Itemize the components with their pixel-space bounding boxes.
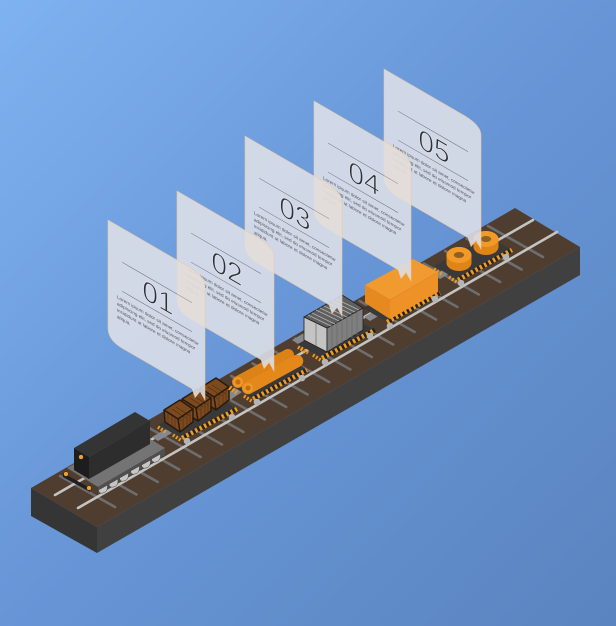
flatbed: [158, 394, 237, 438]
card 02: [177, 191, 274, 374]
railway platform: [31, 208, 580, 553]
crate 2: [182, 389, 211, 421]
card 03 body text: adipiscing elit, sed do eiusmod tempor: [254, 217, 333, 268]
headlights: [64, 455, 91, 490]
card 01 body text: Lorem ipsum dolor sit amet, consectetur: [117, 295, 199, 347]
card 02 body text: Lorem ipsum dolor sit amet, consectetur: [186, 266, 268, 318]
card 03: 03: [279, 190, 311, 239]
card 05 body text: incididunt ut labore et dolore magna: [393, 157, 466, 205]
end hazard marks: [298, 347, 322, 361]
card 05 body text: aliqua.: [393, 163, 407, 176]
card 02 body text: adipiscing elit, sed do eiusmod tempor: [186, 272, 265, 323]
flatbed: [434, 236, 512, 280]
card 04: 04: [348, 155, 380, 204]
card 05: 05: [418, 123, 450, 172]
card 01 body text: aliqua.: [117, 314, 131, 327]
card 03 body text: Lorem ipsum dolor sit amet, consectetur: [254, 211, 336, 263]
hazard band: [253, 370, 307, 399]
hazard band: [322, 330, 375, 358]
ring back: [474, 231, 498, 255]
crate 3: [200, 378, 229, 410]
end hazard marks: [229, 348, 308, 402]
card 02: 02: [211, 245, 243, 294]
card 04 body text: adipiscing elit, sed do eiusmod tempor: [323, 182, 402, 233]
ring front: [446, 247, 472, 271]
wheels: [254, 375, 305, 405]
locomotive: [63, 412, 165, 494]
chassis: [63, 432, 165, 494]
card 01: [108, 220, 205, 403]
sleepers: [60, 226, 543, 507]
wagon couplers: [152, 268, 452, 441]
wheels: [184, 414, 235, 444]
tube holes: [235, 379, 251, 391]
wagon 3: grey container: [298, 295, 375, 365]
cab body: [74, 412, 150, 479]
rails: [55, 220, 557, 508]
card 04 body text: aliqua.: [323, 195, 337, 208]
flatbed: [229, 353, 307, 399]
end hazard marks: [434, 269, 458, 283]
wagon 2: tubes: [229, 348, 308, 405]
card 03: [245, 136, 342, 319]
card 01 body text: adipiscing elit, sed do eiusmod tempor: [117, 301, 196, 352]
container: [304, 295, 363, 352]
wagon 1: crates: [158, 378, 237, 444]
overlap tint: cards 02 and 03: [245, 231, 274, 272]
container ribs: [308, 299, 359, 349]
overlap tint: cards 04 and 05: [384, 142, 410, 204]
card 03 body text: aliqua.: [254, 230, 268, 243]
wheels: [387, 296, 438, 329]
card 04 body text: incididunt ut labore et dolore magna: [323, 189, 396, 237]
flatbed: [363, 279, 440, 322]
card 04: [314, 101, 411, 284]
hazard band: [387, 293, 440, 322]
card 05 body text: Lorem ipsum dolor sit amet, consectetur: [393, 144, 475, 196]
wagon 5: rings: [434, 231, 512, 286]
wheels: [458, 254, 509, 286]
card 05 body text: adipiscing elit, sed do eiusmod tempor: [393, 150, 472, 201]
flatbed: [298, 316, 375, 358]
overlap tint: cards 03 and 04: [314, 176, 342, 236]
crate 1: [164, 400, 193, 432]
hazard band: [182, 409, 237, 438]
tubes: [238, 355, 297, 388]
tube ends: [233, 377, 253, 393]
wheels: [322, 333, 373, 365]
end hazard marks: [158, 387, 237, 441]
wheels: [98, 454, 161, 493]
card 01: 01: [142, 274, 174, 323]
card 04 body text: Lorem ipsum dolor sit amet, consectetur: [323, 176, 405, 228]
hazard band: [458, 250, 512, 280]
card 05: [384, 69, 481, 252]
card 02 body text: incididunt ut labore et dolore magna: [186, 279, 259, 327]
overlap tint: cards 01 and 02: [177, 260, 204, 326]
wagon 4: orange box: [363, 259, 440, 329]
box: [365, 259, 438, 319]
card 01 body text: incididunt ut labore et dolore magna: [117, 308, 190, 356]
card 03 body text: incididunt ut labore et dolore magna: [254, 224, 327, 272]
card 02 body text: aliqua.: [186, 285, 200, 298]
